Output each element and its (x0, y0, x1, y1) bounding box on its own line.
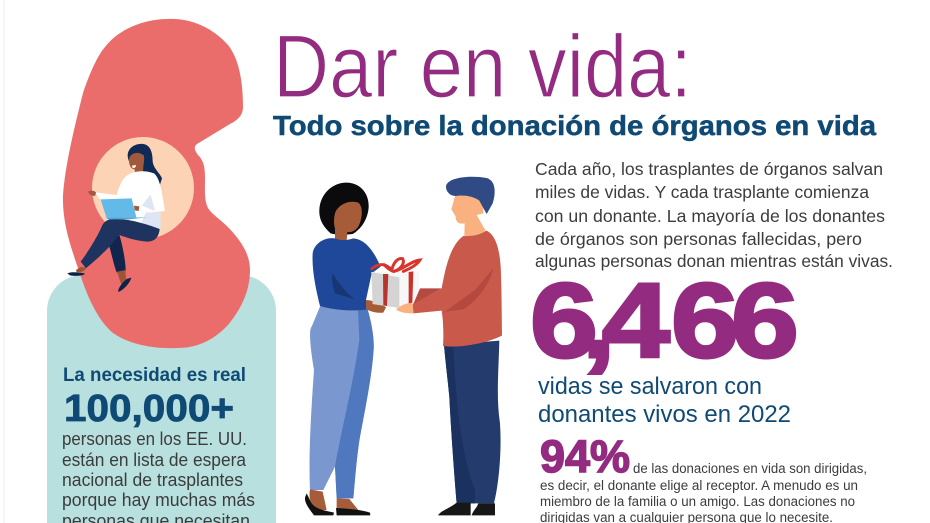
hand (366, 300, 386, 313)
trousers (310, 305, 374, 498)
panel body text: nacional de trasplantes (62, 470, 243, 490)
intro paragraph: algunas personas donan mientras están vivas. (535, 251, 893, 271)
stat: 100,000+: 100,000+ (64, 388, 234, 430)
subtitle: Todo sobre la donación de órganos en vida (273, 110, 876, 141)
woman donor (305, 183, 386, 515)
laptop (101, 198, 136, 218)
sweater (413, 231, 502, 347)
hair (319, 183, 369, 235)
panel heading: La necesidad es real (63, 365, 246, 386)
hair (446, 177, 495, 214)
hair (128, 144, 162, 186)
directed donation text: de las donaciones en vida son dirigidas, (633, 461, 867, 476)
illustration: donors exchanging gift (305, 177, 502, 515)
sweater (95, 171, 165, 229)
stat caption: vidas se salvaron con (538, 373, 762, 400)
man donor (396, 177, 502, 515)
panel body text: personas en los EE. UU. (62, 429, 247, 449)
big stat: 6,466: 6,466 (530, 262, 799, 380)
hand (396, 303, 413, 313)
stat: 94%: 94% (540, 431, 630, 482)
sweater (313, 238, 381, 310)
gift box (371, 258, 420, 308)
panel body text: porque hay muchas más (62, 490, 255, 510)
intro paragraph: miles de vidas. Y cada trasplante comienza (535, 182, 869, 202)
icon: kidney shape (63, 19, 250, 348)
directed donation text: es decir, el donante elige al receptor. A menudo es un (540, 478, 858, 493)
hands (88, 191, 96, 196)
illustration: woman with laptop (67, 144, 165, 292)
intro paragraph: de órganos son personas fallecidas, pero (535, 229, 862, 249)
neck and head (451, 193, 486, 237)
directed donation text (540, 461, 867, 523)
trousers (81, 219, 160, 272)
panel body text (62, 429, 255, 523)
feet (309, 489, 327, 510)
panel body text: están en lista de espera (62, 450, 247, 470)
directed donation text: miembro de la familia o un amigo. Las donaciones no (540, 494, 855, 509)
shoes (438, 503, 471, 515)
legs (76, 267, 86, 272)
trousers (444, 341, 501, 503)
ribbon (372, 258, 420, 271)
intro paragraph (535, 159, 893, 271)
intro paragraph: con un donante. La mayoría de los donantes (535, 206, 885, 226)
stat caption: donantes vivos en 2022 (538, 401, 791, 428)
intro paragraph: Cada año, los trasplantes de órganos salvan (535, 159, 883, 179)
shoes (67, 272, 85, 276)
face (129, 153, 144, 173)
panel: need for donors (47, 275, 276, 523)
icon: peach circle (92, 137, 194, 239)
face (334, 202, 362, 241)
title: Dar en vida: (273, 16, 692, 116)
stat caption (538, 373, 791, 428)
